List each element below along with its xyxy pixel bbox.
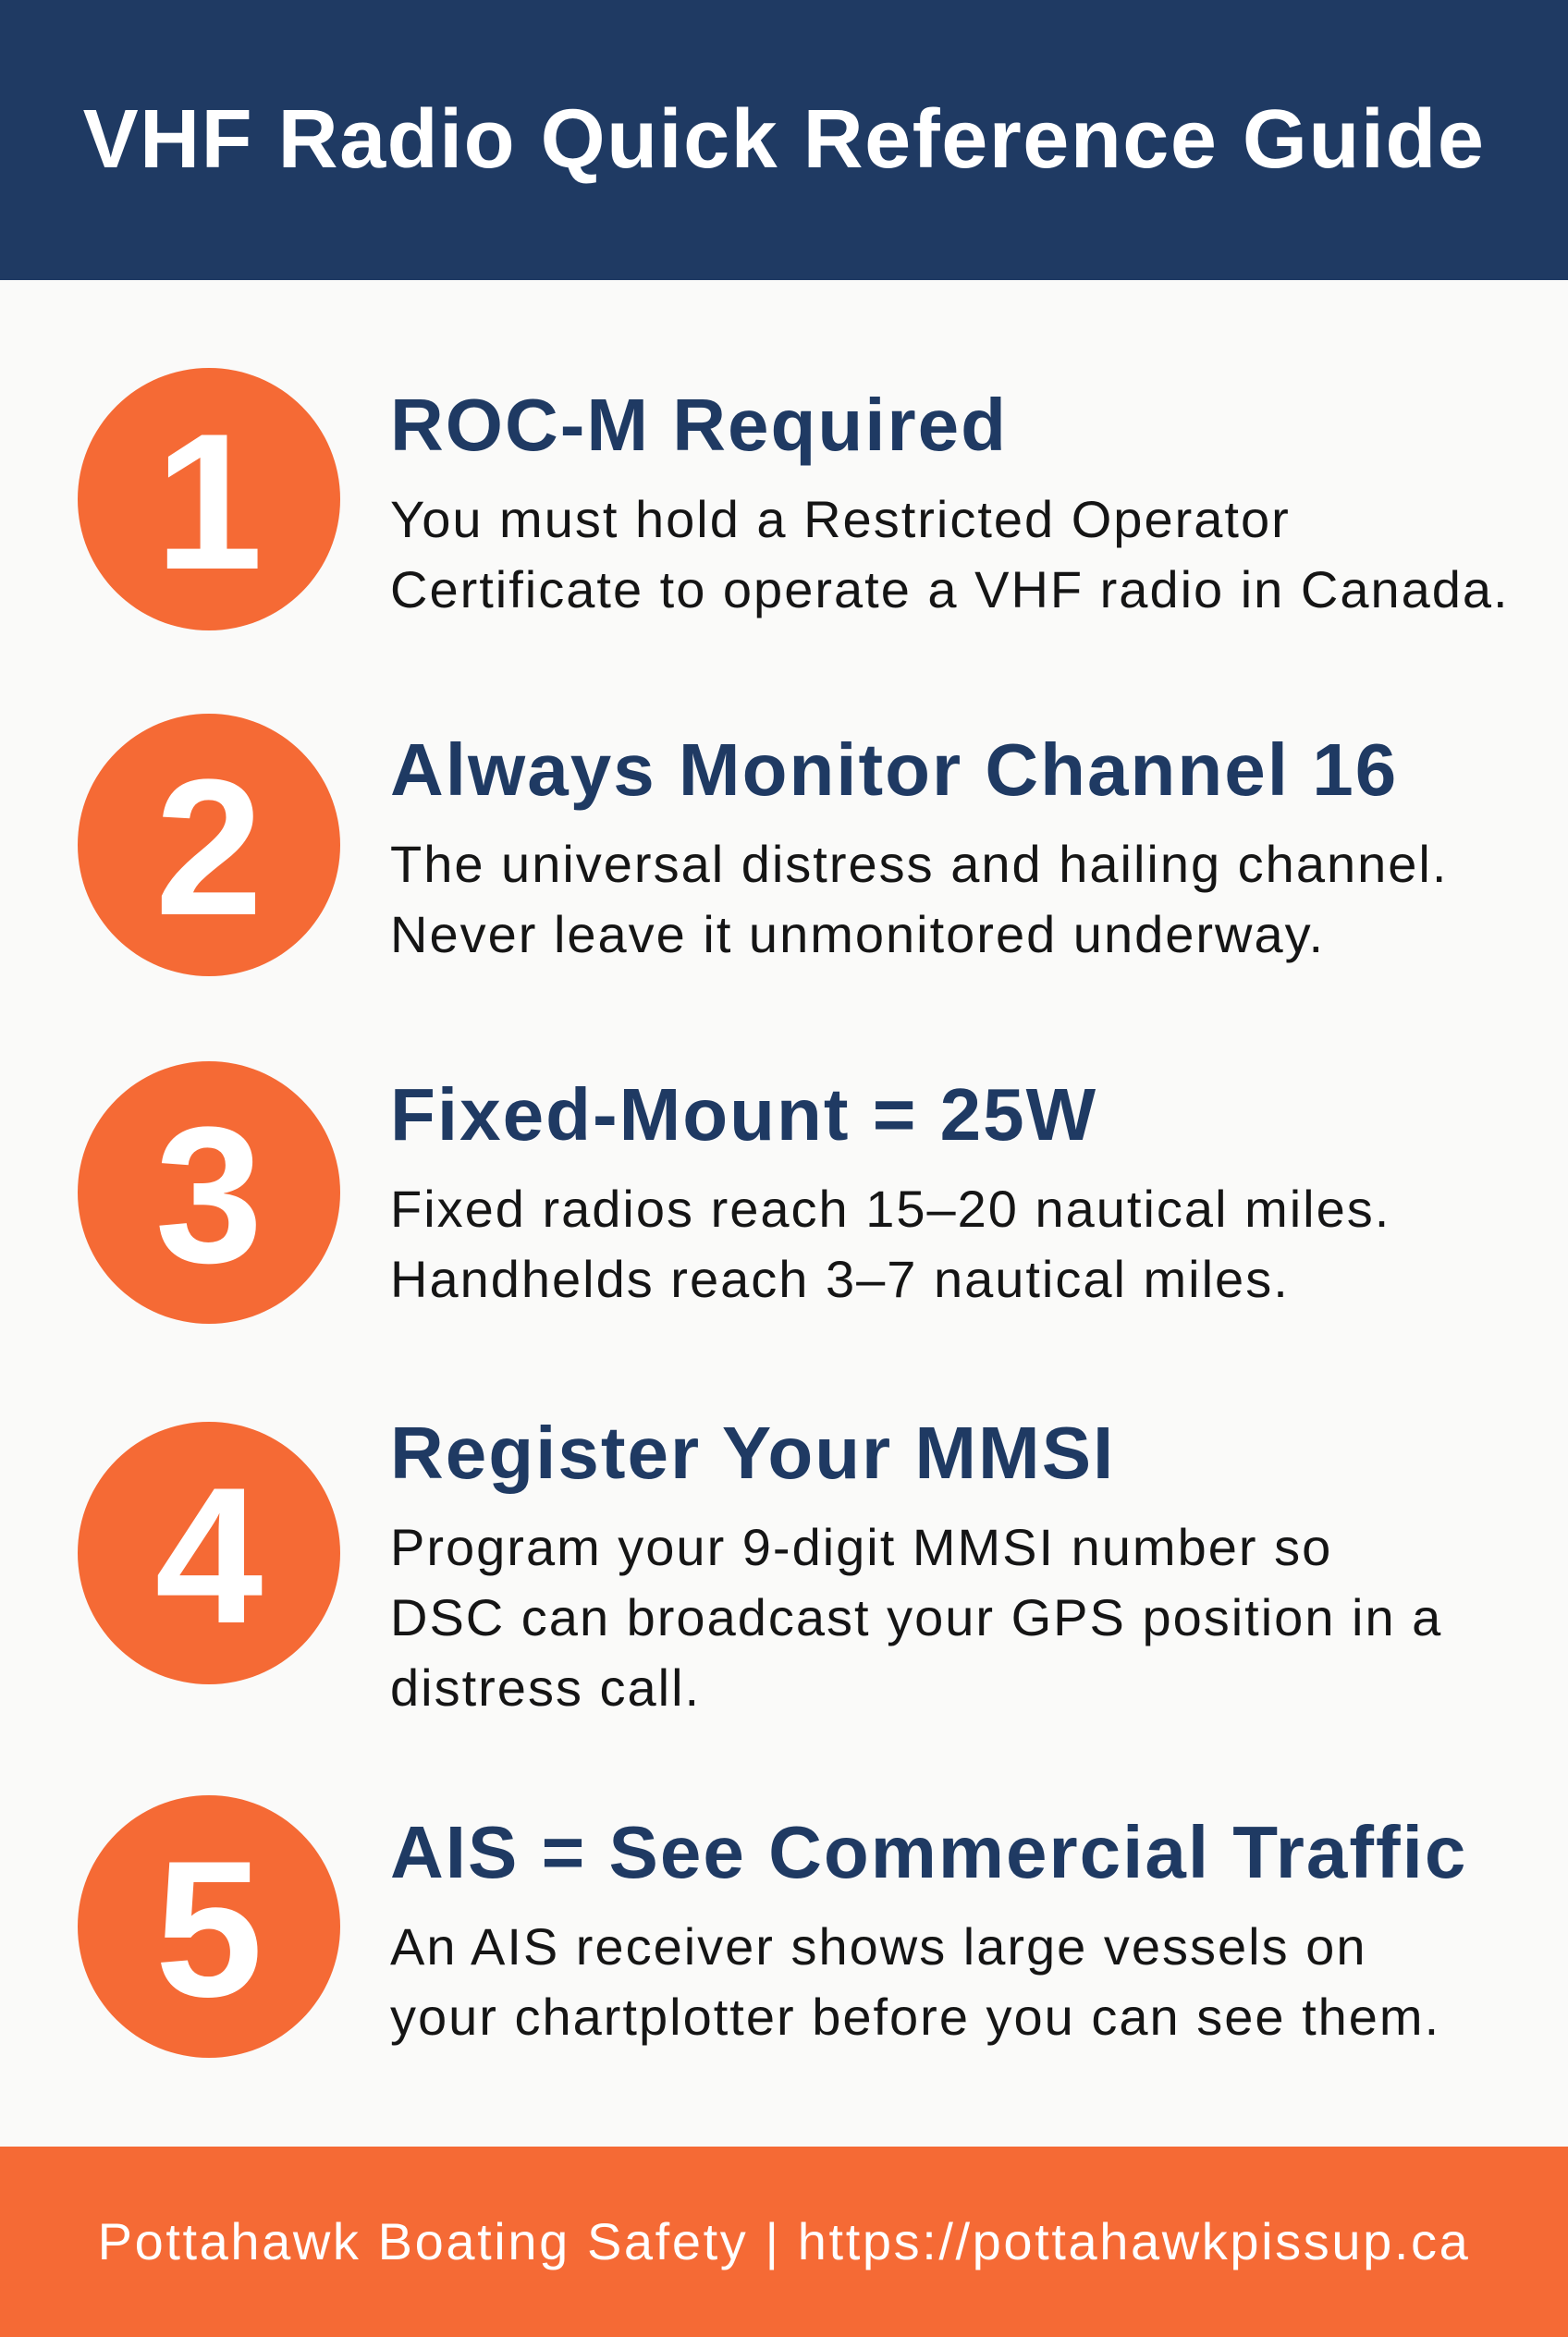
icon: number 1 circle bbox=[78, 368, 340, 630]
body 4: distress call. bbox=[390, 1658, 701, 1717]
icon: number 2 circle: 2 bbox=[155, 739, 263, 956]
item 1: ROC-M Required bbox=[390, 384, 1510, 618]
heading 5: AIS = See Commercial Traffic bbox=[390, 1811, 1467, 1893]
body 3 bbox=[390, 1180, 1390, 1308]
body 4: DSC can broadcast your GPS position in a bbox=[390, 1588, 1442, 1646]
icon: number 4 circle: 4 bbox=[155, 1447, 263, 1664]
body 5: An AIS receiver shows large vessels on bbox=[390, 1917, 1366, 1976]
icon: number 5 circle: 5 bbox=[155, 1820, 263, 2037]
icon: number 1 circle: 1 bbox=[155, 393, 263, 610]
body 4: Program your 9-digit MMSI number so bbox=[390, 1518, 1332, 1576]
icon: number 2 circle bbox=[78, 714, 340, 976]
body 1: You must hold a Restricted Operator bbox=[390, 490, 1291, 548]
title: VHF Radio Quick Reference Guide bbox=[83, 93, 1485, 186]
icon: number 5 circle bbox=[78, 1795, 340, 2058]
body 3: Handhelds reach 3–7 nautical miles. bbox=[390, 1250, 1290, 1308]
heading 3: Fixed-Mount = 25W bbox=[390, 1073, 1097, 1156]
body 5: your chartplotter before you can see them. bbox=[390, 1988, 1440, 2046]
item 2: Channel 16 bbox=[390, 728, 1448, 963]
item 4: MMSI bbox=[390, 1412, 1442, 1717]
body 1: Certificate to operate a VHF radio in Canada. bbox=[390, 560, 1510, 618]
footer band bbox=[0, 2147, 1568, 2337]
body 1 bbox=[390, 490, 1510, 618]
footer text: Pottahawk Boating Safety | https://pottahawkpissup.ca bbox=[98, 2212, 1470, 2270]
body 2: The universal distress and hailing channel. bbox=[390, 835, 1448, 893]
heading 2: Always Monitor Channel 16 bbox=[390, 728, 1398, 811]
body 5 bbox=[390, 1917, 1440, 2046]
icon: number 3 circle bbox=[78, 1061, 340, 1324]
item 5: AIS bbox=[390, 1811, 1467, 2046]
body 2: Never leave it unmonitored underway. bbox=[390, 905, 1325, 963]
item 3: Fixed-Mount bbox=[390, 1073, 1390, 1308]
body 2 bbox=[390, 835, 1448, 963]
icon: number 3 circle: 3 bbox=[155, 1086, 263, 1303]
heading 1: ROC-M Required bbox=[390, 384, 1008, 466]
body 4 bbox=[390, 1518, 1442, 1717]
body 3: Fixed radios reach 15–20 nautical miles. bbox=[390, 1180, 1390, 1238]
icon: number 4 circle bbox=[78, 1422, 340, 1684]
header band bbox=[0, 0, 1568, 280]
heading 4: Register Your MMSI bbox=[390, 1412, 1115, 1494]
